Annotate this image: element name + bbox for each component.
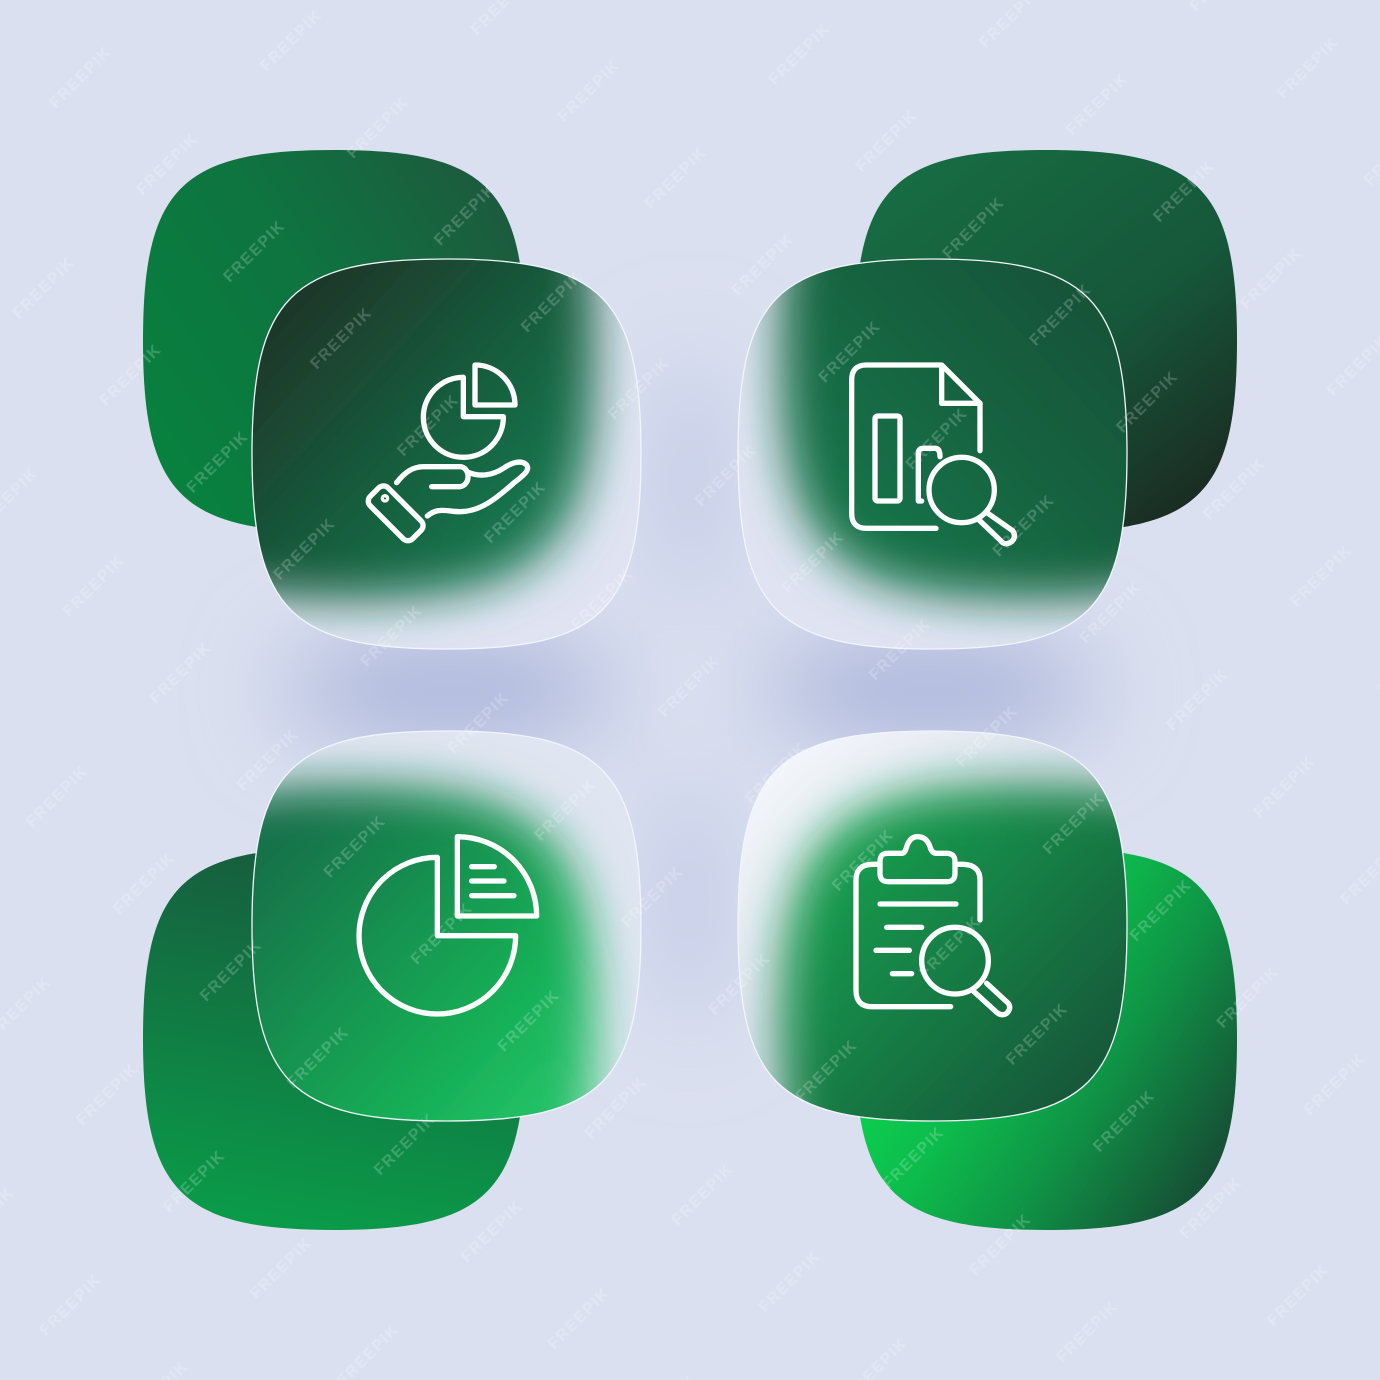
glass panel: hand with pie chart xyxy=(251,258,642,650)
glass panel: clipboard search xyxy=(737,730,1128,1122)
icon: pie chart with text slice xyxy=(359,837,537,1014)
icon: clipboard with magnifier xyxy=(856,837,1010,1015)
infographic canvas xyxy=(143,150,1237,1230)
back shape: bottom left xyxy=(143,848,525,1230)
glass panel: document bar chart search xyxy=(737,258,1128,650)
back shape: top right xyxy=(855,150,1237,532)
glass panel: pie chart with document slice xyxy=(251,730,642,1122)
back shape: top left xyxy=(143,150,525,532)
icon: hand holding pie chart xyxy=(365,365,528,544)
icon: document with bars and magnifier xyxy=(852,365,1014,544)
back shape: bottom right xyxy=(855,848,1237,1230)
soft blue shadows xyxy=(280,350,1100,1030)
